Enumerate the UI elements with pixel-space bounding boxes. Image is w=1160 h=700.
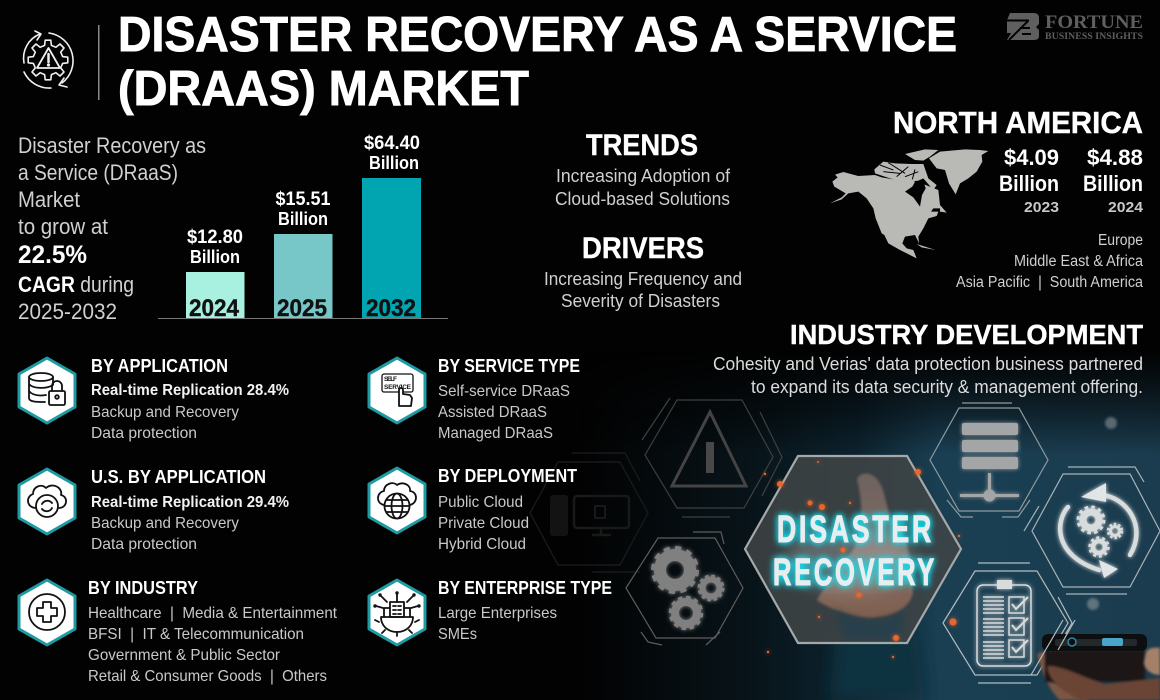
bar: 2024 <box>186 227 244 322</box>
panel: industry development: to expand its data security & management offering. <box>751 377 1143 397</box>
bar: 2025: $15.51 <box>276 189 331 210</box>
bar: 2025 <box>274 189 332 322</box>
panel: by deployment: Hybrid Cloud <box>438 536 526 553</box>
map: north america <box>830 149 988 258</box>
logo: fortune business insights <box>1007 12 1143 42</box>
bar: 2024: 2024 <box>189 295 240 322</box>
bar: 2032: 2032 <box>366 295 416 322</box>
icon: self service button: SERVICE <box>384 384 412 391</box>
central label: disaster recovery <box>773 509 937 594</box>
panel: north america: Asia Pacific | South America <box>956 274 1143 291</box>
panel: north america <box>830 105 1144 291</box>
panel: north america: 2023 <box>1024 199 1059 216</box>
panel: by service type: Managed DRaaS <box>438 425 553 442</box>
icon: database with lock <box>19 358 75 423</box>
panel: by application: Data protection <box>91 425 197 442</box>
central hexagon with hand <box>745 456 961 643</box>
panel: by industry: BFSI | IT & Telecommunication <box>88 626 304 643</box>
panel: by service type: Self-service DRaaS <box>438 383 570 400</box>
panel: by service type: Assisted DRaaS <box>438 404 547 421</box>
panel: trends <box>555 129 731 209</box>
text block: market growth summary <box>18 133 206 324</box>
panel: north america: Middle East & Africa <box>1014 253 1143 270</box>
panel: by enterprise type: Large Enterprises <box>438 605 557 622</box>
clipboard hexagon <box>943 563 1072 683</box>
text block: market growth summary: Disaster Recovery as <box>18 133 206 158</box>
panel: north america: Billion <box>1083 171 1143 196</box>
panel: by enterprise type: SMEs <box>438 626 477 643</box>
panel: by application <box>19 356 289 442</box>
orange sparks <box>764 461 960 658</box>
panel: by application: Backup and Recovery <box>91 404 239 421</box>
bar chart: market size <box>158 133 448 322</box>
panel: u.s. by application: Backup and Recovery <box>91 515 239 532</box>
panel: by enterprise type <box>369 578 612 645</box>
panel: north america: Billion <box>999 171 1059 196</box>
panel: drivers <box>544 232 742 311</box>
computer hexagon <box>530 453 648 572</box>
panel: north america: $4.09 <box>1004 145 1059 170</box>
bar: 2024: $12.80 <box>187 227 243 248</box>
process gears hexagon <box>1024 467 1160 594</box>
bar: 2024: Billion <box>190 246 240 267</box>
panel: north america: 2024 <box>1108 199 1144 216</box>
panel: by deployment <box>369 466 577 553</box>
panel: by deployment: BY DEPLOYMENT <box>438 466 577 486</box>
panel: trends: Increasing Adoption of <box>556 166 731 186</box>
bar: 2032: Billion <box>369 152 419 173</box>
phone and hand <box>1031 620 1160 700</box>
panel: north america: Europe <box>1098 232 1143 249</box>
panel: north america: NORTH AMERICA <box>893 105 1143 140</box>
server hexagon <box>930 403 1048 517</box>
central label: disaster recovery: RECOVERY <box>773 552 937 594</box>
title <box>118 8 957 116</box>
panel: by application: Real-time Replication 28.4% <box>91 382 289 399</box>
title: DISASTER RECOVERY AS A SERVICE <box>118 8 957 62</box>
logo: fortune business insights: FORTUNE <box>1045 12 1143 33</box>
title: (DRAAS) MARKET <box>118 62 529 116</box>
panel: u.s. by application: Data protection <box>91 536 197 553</box>
bar: 2032 <box>362 133 421 322</box>
panel: drivers: Severity of Disasters <box>561 291 720 311</box>
panel: by enterprise type: BY ENTERPRISE TYPE <box>438 578 612 598</box>
logo: fortune business insights: BUSINESS INSIGHTS <box>1045 32 1143 42</box>
panel: industry development <box>713 319 1143 397</box>
text block: market growth summary: 22.5% <box>18 241 87 269</box>
panel: u.s. by application <box>19 467 289 553</box>
icon: self service button <box>369 358 425 423</box>
bar: 2025: 2025 <box>277 295 327 322</box>
text block: market growth summary: 2025-2032 <box>18 299 117 324</box>
central label: disaster recovery: DISASTER <box>777 509 934 551</box>
text block: market growth summary: a Service (DRaaS) <box>18 160 178 185</box>
bar: 2032: $64.40 <box>364 133 420 154</box>
icon: cloud with sync <box>19 469 75 534</box>
panel: north america: $4.88 <box>1087 145 1143 170</box>
panel: by industry <box>19 578 338 685</box>
panel: industry development: INDUSTRY DEVELOPMENT <box>790 319 1143 350</box>
warning hexagon <box>642 398 782 517</box>
icon: cloud with globe <box>369 468 425 533</box>
panel: trends: TRENDS <box>586 129 698 162</box>
text block: market growth summary: CAGR during <box>18 272 134 297</box>
panel: by deployment: Public Cloud <box>438 494 523 511</box>
panel: trends: Cloud-based Solutions <box>555 189 730 209</box>
icon: medical cross <box>19 580 75 645</box>
panel: by service type <box>369 356 580 442</box>
panel: drivers: Increasing Frequency and <box>544 269 742 289</box>
panel: by application: BY APPLICATION <box>91 356 228 376</box>
text block: market growth summary: to grow at <box>18 214 108 239</box>
panel: by deployment: Private Cloud <box>438 515 529 532</box>
gears hexagon <box>626 532 743 645</box>
icon: self service button: SELF <box>384 376 397 383</box>
panel: u.s. by application: U.S. BY APPLICATION <box>91 467 266 487</box>
bar: 2025: Billion <box>278 208 328 229</box>
icon: gear with warning triangle and cycle arrows <box>24 31 73 88</box>
panel: by industry: Healthcare | Media & Entertainment <box>88 605 338 622</box>
header divider <box>98 25 100 100</box>
icon: enterprise building with gear <box>369 580 425 645</box>
panel: by industry: Government & Public Sector <box>88 647 281 664</box>
panel: by industry: BY INDUSTRY <box>88 578 198 598</box>
panel: industry development: Cohesity and Verias' data protection business partnered <box>713 354 1143 374</box>
panel: by industry: Retail & Consumer Goods | Others <box>88 668 327 685</box>
background photo: hand and holographic hexagons <box>530 350 1160 700</box>
text block: market growth summary: Market <box>18 187 80 212</box>
panel: drivers: DRIVERS <box>582 232 704 265</box>
panel: u.s. by application: Real-time Replication 29.4% <box>91 494 289 511</box>
panel: by service type: BY SERVICE TYPE <box>438 356 580 376</box>
